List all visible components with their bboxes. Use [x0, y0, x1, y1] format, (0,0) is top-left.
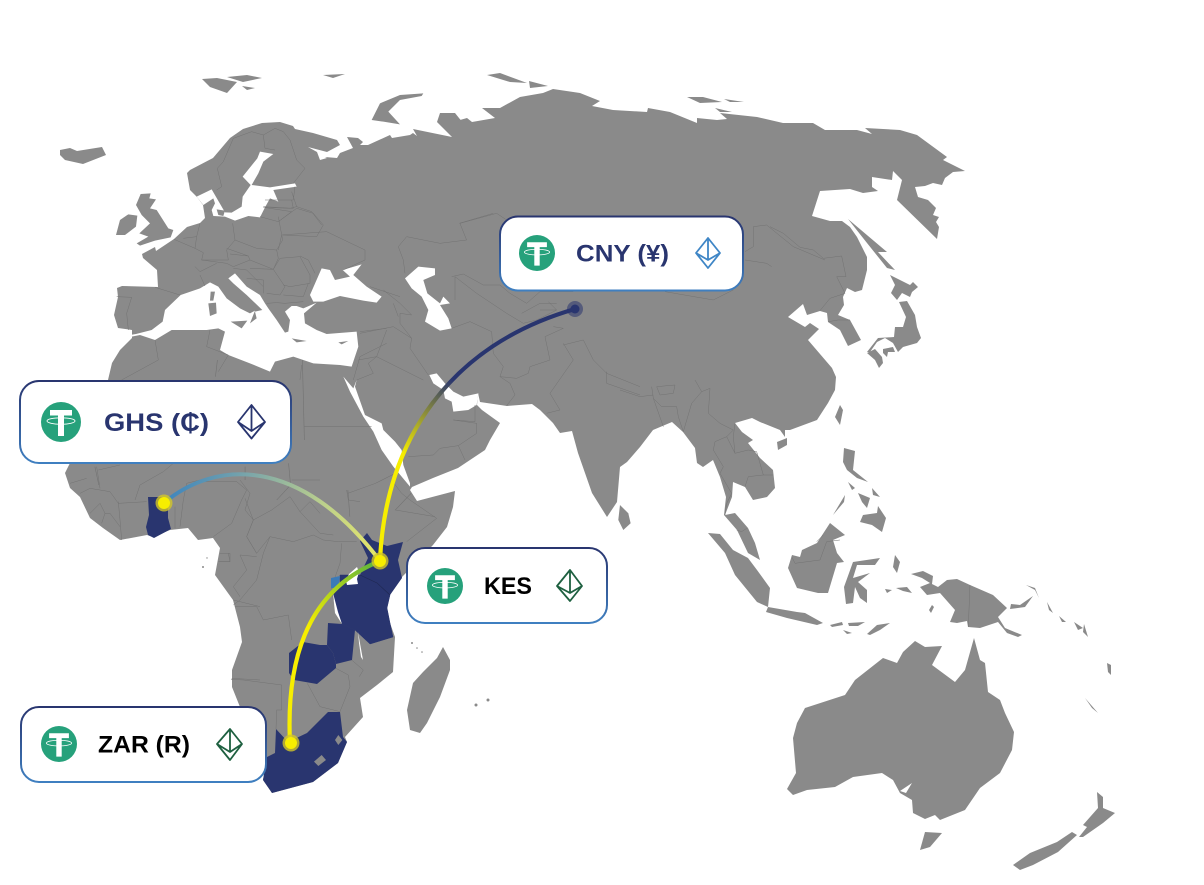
icon: ethereum	[238, 405, 265, 438]
card: KES	[407, 548, 607, 623]
country borders	[70, 128, 970, 729]
card: CNY	[500, 216, 743, 290]
country: Tanzania	[333, 575, 393, 644]
card: GHS	[20, 381, 291, 463]
world map	[60, 73, 1115, 870]
icon: tether	[427, 568, 463, 604]
Kenya–Tanzania border	[360, 575, 390, 595]
icon: ethereum	[696, 238, 720, 268]
inland seas	[130, 152, 478, 487]
currency label: GHS (₵)	[104, 409, 209, 437]
card: ZAR	[21, 707, 266, 782]
currency label: KES	[484, 573, 532, 600]
islands	[60, 73, 1115, 870]
dot: Ghana	[156, 494, 172, 512]
icon: tether	[41, 402, 81, 442]
dot: China	[567, 301, 583, 317]
arc: Ghana to Kenya	[164, 474, 380, 561]
country: Rwanda	[331, 576, 340, 588]
currency label: CNY (¥)	[576, 240, 669, 268]
currency label: ZAR (R)	[98, 732, 190, 758]
spencer gulf	[900, 783, 912, 793]
highlighted countries	[146, 497, 403, 793]
icon: ethereum	[557, 570, 582, 601]
icon: tether	[519, 235, 555, 271]
icon: ethereum	[217, 729, 242, 760]
country: Ghana	[146, 497, 171, 538]
dot: Kenya	[372, 552, 388, 570]
arc: Kenya to South Africa	[290, 561, 380, 743]
country: Kenya	[360, 533, 403, 595]
arc: Kenya to China	[380, 309, 575, 561]
landmass: Eurasia and Africa	[65, 89, 965, 793]
country: Malawi region	[327, 623, 355, 664]
dot: South Africa	[282, 734, 300, 752]
country: Zambia	[289, 642, 336, 684]
icon: tether	[41, 726, 77, 762]
enclaves and lakes	[314, 567, 363, 766]
country: South Africa	[263, 712, 347, 793]
